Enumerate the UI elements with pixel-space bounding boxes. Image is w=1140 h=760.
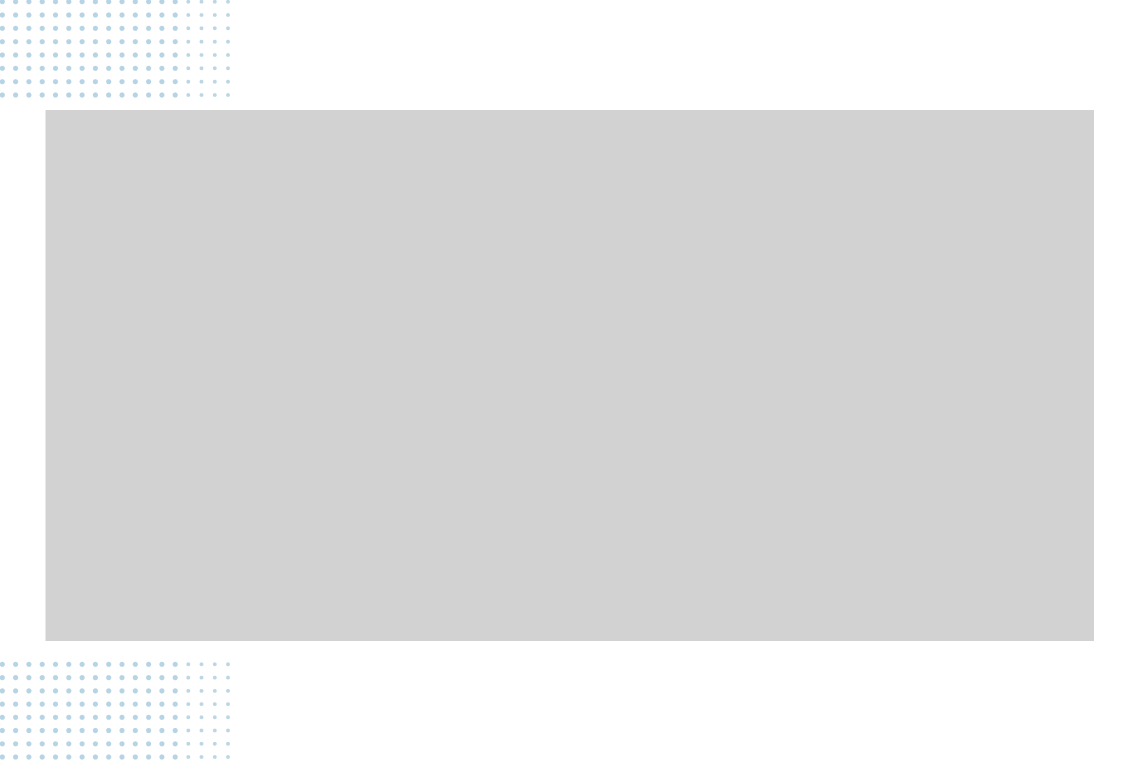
dot grid: bottom left	[0, 662, 230, 760]
dot grid: top left	[0, 0, 230, 98]
gray image placeholder panel	[46, 110, 1094, 641]
